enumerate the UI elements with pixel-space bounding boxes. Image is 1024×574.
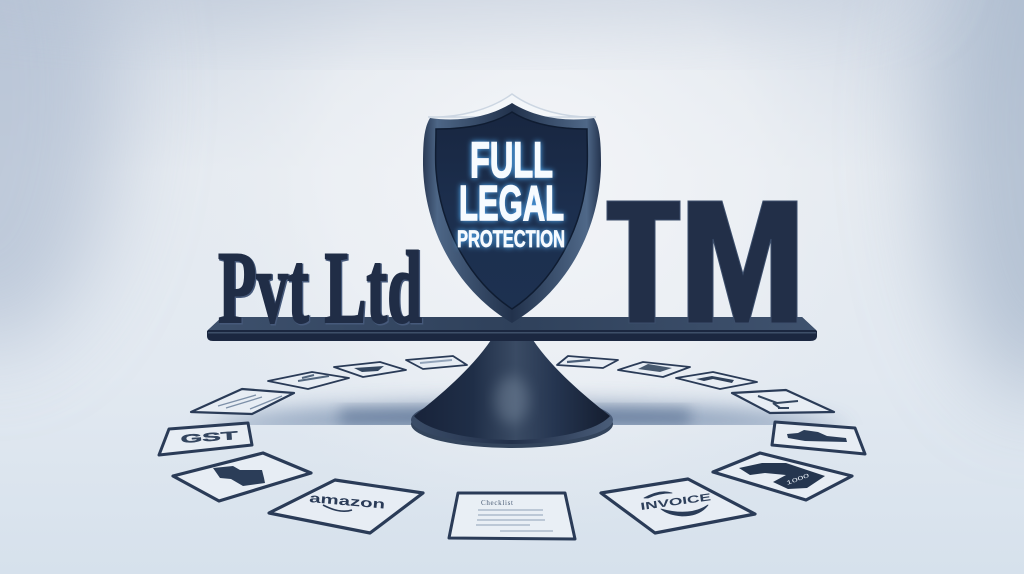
label: Pvt Ltd: Pvt Ltd xyxy=(218,231,422,345)
floor shadow band xyxy=(200,404,850,430)
card: amazon: amazon xyxy=(309,490,386,511)
shield heading: FULL LEGAL PROTECTION: PROTECTION xyxy=(457,226,565,253)
cards: right arc xyxy=(557,356,865,533)
shield heading: FULL LEGAL PROTECTION xyxy=(457,132,565,253)
card: document lines xyxy=(191,389,294,414)
card: invoice: INVOICE xyxy=(640,492,712,513)
card: checklist document: Checklist xyxy=(481,499,513,507)
label: Pvt Ltd: Pvt Ltd xyxy=(219,232,423,346)
card: invoice xyxy=(601,479,755,533)
card: box with label: 1000 xyxy=(786,473,810,487)
card: small form xyxy=(268,372,349,389)
card: silhouette xyxy=(772,422,865,454)
card: small document far left xyxy=(406,356,467,369)
label: TM xyxy=(607,201,797,323)
cards: left arc xyxy=(159,356,575,539)
card: GST xyxy=(159,423,252,455)
card: box with label xyxy=(713,453,852,500)
label: Pvt Ltd xyxy=(218,231,423,346)
balance beam xyxy=(207,317,817,341)
card: amazon xyxy=(269,480,423,533)
card: image icon xyxy=(618,362,690,377)
card: small document far right xyxy=(557,356,618,368)
shield outer rim xyxy=(423,103,601,323)
shield heading: FULL LEGAL PROTECTION: FULL xyxy=(470,132,553,188)
card: small icon xyxy=(676,372,757,389)
shield face xyxy=(436,112,587,309)
card: scales icon xyxy=(732,390,834,413)
shield heading: FULL LEGAL PROTECTION: LEGAL xyxy=(459,177,564,231)
shield light outline xyxy=(428,94,596,117)
card: checklist document xyxy=(449,493,575,539)
card: icon xyxy=(334,362,406,377)
card: GST: GST xyxy=(180,428,239,445)
shield xyxy=(423,94,601,323)
balance pedestal cone xyxy=(411,340,613,448)
card: silhouette icon xyxy=(173,453,311,501)
